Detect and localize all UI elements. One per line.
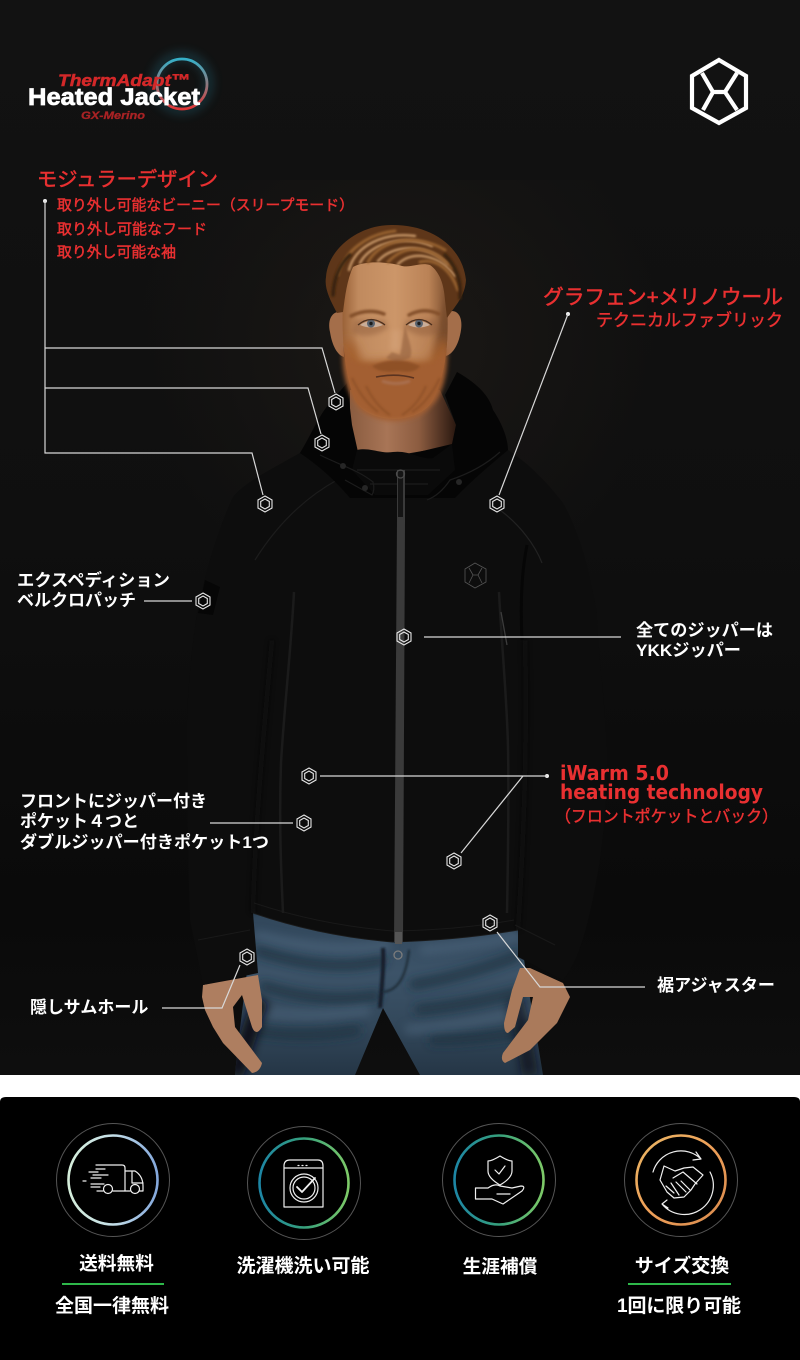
center zipper	[394, 470, 405, 942]
heading: graphene merino: グラフェン+メリノウール	[543, 286, 783, 309]
hotspot markers	[196, 394, 504, 965]
icon: washing machine	[284, 1160, 323, 1207]
callout: iWarm heating: iWarm 5.0	[560, 761, 669, 785]
left pocket zipper	[280, 592, 294, 913]
leader lines: modular design	[43, 199, 335, 495]
panel: guarantees	[0, 1097, 800, 1360]
jeans	[235, 905, 543, 1075]
mouth	[372, 360, 420, 384]
logo line: ThermAdapt: ThermAdapt™	[58, 71, 190, 90]
callout: hem adjuster: 裾アジャスター	[657, 976, 775, 995]
divider: size exchange	[628, 1283, 731, 1285]
badge: machine washable	[236, 1126, 370, 1277]
icon: handshake with arrows	[653, 1151, 713, 1215]
callout: YKK zippers: 全てのジッパーは	[636, 621, 773, 640]
callout: iWarm heating: heating technology	[560, 780, 763, 804]
hair	[326, 225, 466, 318]
logo: ThermAdapt Heated Jacket	[28, 56, 209, 122]
nose	[386, 325, 411, 361]
list: detachable parts	[57, 197, 354, 261]
white divider strip	[0, 1075, 800, 1098]
brand hexagon mark	[692, 60, 746, 123]
label: size exchange: サイズ交換	[635, 1254, 729, 1277]
left hand	[202, 975, 262, 1073]
sublabel: nationwide: 全国一律無料	[55, 1295, 169, 1317]
callout: iWarm heating	[320, 761, 778, 853]
badge: free shipping	[55, 1124, 170, 1317]
callout: front pockets: ダブルジッパー付きポケット1つ	[20, 832, 269, 852]
collar	[352, 444, 455, 495]
callout: YKK zippers	[424, 621, 773, 660]
leader line: graphene merino	[499, 312, 570, 495]
label: lifetime warranty: 生涯補償	[463, 1256, 538, 1277]
right pocket pull	[501, 612, 507, 645]
logo line: Heated Jacket: Heated Jacket	[28, 84, 200, 111]
callout: YKK zippers: YKKジッパー	[636, 641, 741, 660]
beard texture	[352, 378, 440, 415]
beard	[343, 345, 447, 421]
callout: front pockets: ポケット４つと	[20, 811, 139, 831]
icon: shield in hand	[476, 1156, 524, 1204]
callout: velcro patch: エクスペディション	[17, 570, 170, 590]
chest logo	[465, 563, 486, 588]
icon: delivery truck	[83, 1165, 143, 1194]
photo: man wearing jacket	[198, 225, 570, 1075]
list: detachable parts: 取り外し可能な袖	[57, 244, 176, 261]
background glow behind head	[140, 180, 660, 580]
logo ring	[155, 56, 209, 110]
divider: free shipping	[62, 1283, 164, 1285]
list: detachable parts: 取り外し可能なビーニー（スリープモード）	[57, 197, 354, 214]
callout: hem adjuster	[497, 932, 775, 995]
callout: front pockets: フロントにジッパー付き	[20, 792, 207, 811]
velcro patch	[198, 580, 220, 615]
callout: front pockets	[20, 792, 293, 852]
callout: thumbhole	[30, 965, 240, 1017]
callout: velcro patch: ベルクロパッチ	[17, 591, 136, 610]
callout: modular design	[37, 168, 354, 495]
hair strands	[333, 231, 460, 298]
label: machine washable: 洗濯機洗い可能	[236, 1255, 370, 1277]
hood	[300, 372, 508, 498]
neck	[350, 390, 456, 456]
jacket body	[187, 450, 607, 985]
face shadow sides	[436, 303, 446, 346]
subheading: technical fabric: テクニカルファブリック	[596, 310, 783, 330]
collar flaps	[320, 452, 500, 500]
photo background	[0, 0, 800, 1076]
callout: thumbhole: 隠しサムホール	[30, 998, 148, 1017]
callout: iWarm heating: （フロントポケットとバック）	[555, 807, 778, 826]
ears	[329, 311, 461, 357]
callout: velcro patch	[17, 570, 192, 610]
badge: lifetime warranty	[442, 1124, 556, 1277]
heading: modular design: モジュラーデザイン	[37, 168, 218, 191]
face	[342, 262, 448, 408]
right pocket zipper	[499, 592, 508, 913]
right hand	[502, 968, 570, 1063]
callout: graphene merino	[499, 286, 783, 495]
badge: size exchange	[617, 1124, 741, 1317]
snap buttons	[340, 463, 462, 491]
zipper pull	[394, 470, 404, 959]
jacket shading	[198, 480, 555, 945]
logo line: GX-Merino: GX-Merino	[81, 110, 145, 122]
list: detachable parts: 取り外し可能なフード	[57, 221, 207, 238]
label: free shipping: 送料無料	[79, 1253, 154, 1274]
eyebrows	[351, 311, 439, 316]
eyes	[352, 320, 440, 336]
sublabel: once only: 1回に限り可能	[617, 1295, 741, 1317]
